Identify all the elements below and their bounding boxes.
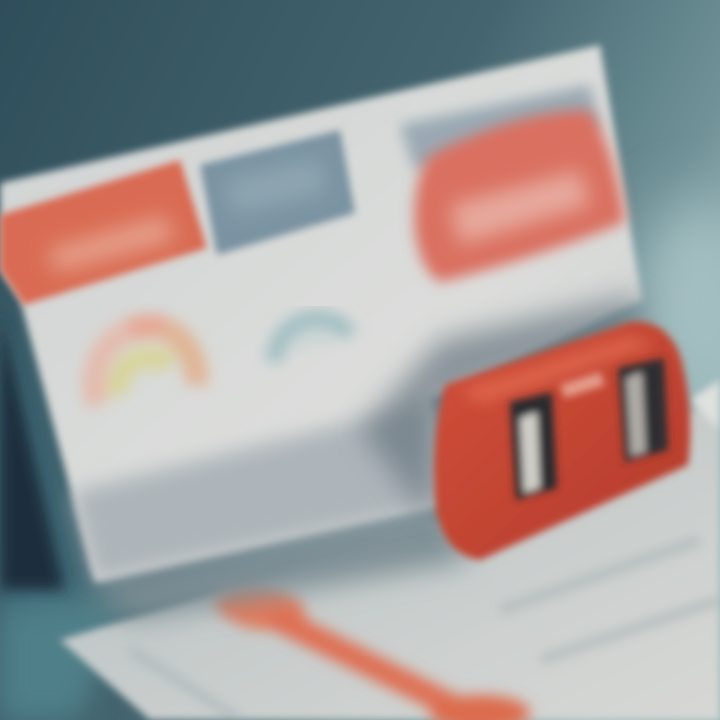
red device	[434, 322, 690, 560]
report card	[0, 45, 642, 582]
gauge icon: teal arc	[275, 319, 350, 362]
panel text smudge	[450, 170, 590, 245]
large red panel	[400, 85, 625, 282]
paper lines	[130, 540, 720, 720]
gray-blue panel	[200, 130, 355, 255]
left slot	[510, 392, 557, 500]
label text smudge	[48, 215, 175, 272]
shadow under card	[90, 500, 470, 620]
device center highlight	[560, 372, 605, 398]
paper sheet on table	[60, 380, 720, 720]
lower band	[72, 400, 445, 582]
gauge icon: coloured arc	[94, 326, 196, 405]
orange spoon shape	[211, 577, 530, 720]
device top highlight	[460, 335, 655, 405]
shadow behind device	[360, 295, 640, 520]
red label panel	[0, 160, 207, 305]
right slot	[618, 358, 668, 462]
